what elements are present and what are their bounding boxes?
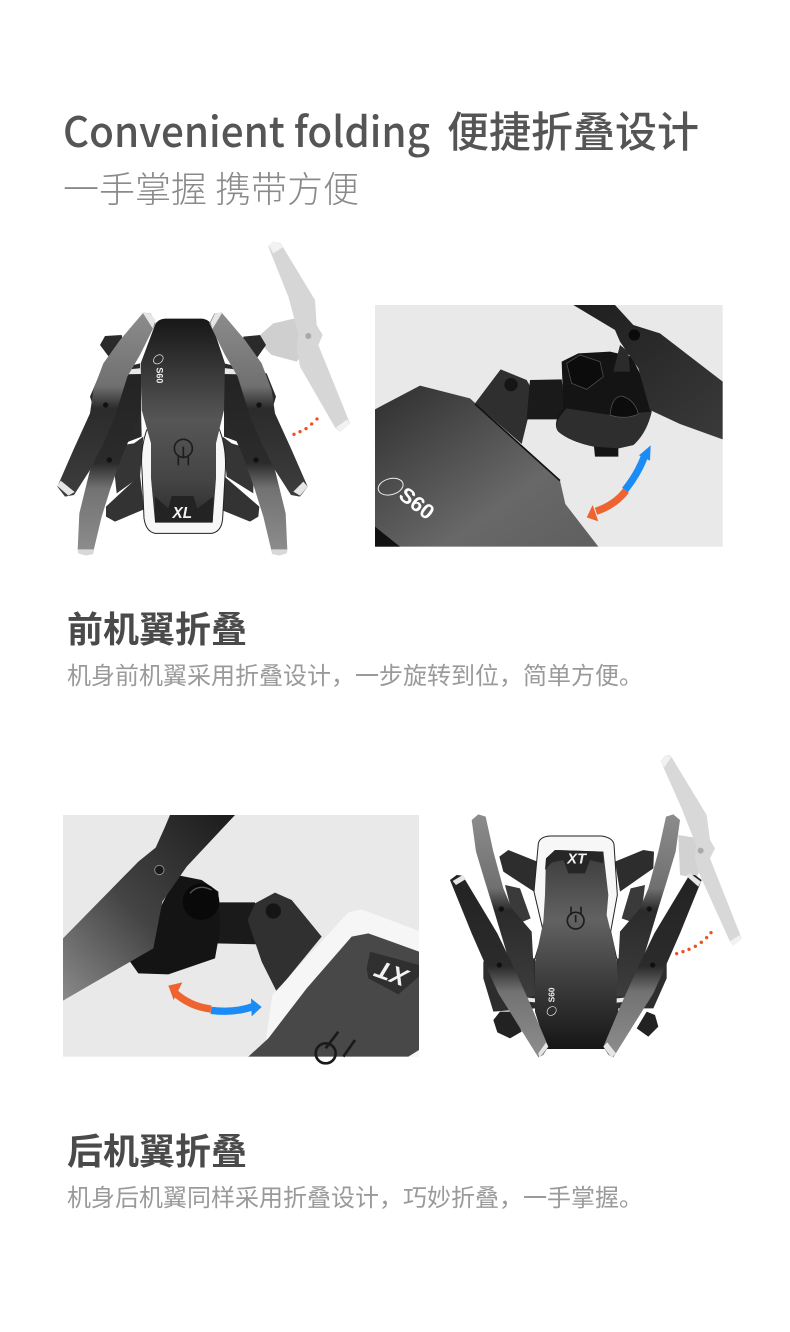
front blades xyxy=(57,313,308,497)
logo plate xyxy=(367,952,419,994)
section text: rear wing: 机身后机翼同样采用折叠设计，巧妙折叠，一手掌握。 xyxy=(67,1178,643,1213)
body logo: S60 xyxy=(546,987,556,1002)
arm bracket xyxy=(475,369,534,444)
photo panel: front arm close-up xyxy=(375,305,723,547)
power icon xyxy=(316,1032,355,1063)
drone body xyxy=(248,933,419,1057)
rivet xyxy=(504,378,518,391)
prop rivet xyxy=(155,865,164,875)
rear arms and motors xyxy=(90,335,276,522)
ghost propeller xyxy=(661,756,742,946)
section heading: front wing: 前机翼折叠 xyxy=(67,601,247,653)
ghost propeller xyxy=(260,242,350,432)
panel background xyxy=(63,815,419,1057)
propeller xyxy=(573,305,723,439)
cap highlight xyxy=(190,887,212,893)
photo panel: rear arm close-up xyxy=(63,815,419,1063)
body logo: S60 xyxy=(155,367,165,383)
drone body xyxy=(375,386,598,547)
white shell xyxy=(142,427,226,533)
arrow: blue xyxy=(211,998,262,1016)
propeller xyxy=(63,815,235,1001)
rear blade xyxy=(78,372,142,554)
rear blade right xyxy=(223,372,287,554)
arrow: blue xyxy=(625,445,651,490)
arrow: orange xyxy=(587,491,626,521)
subtitle: 一手掌握 携带方便 xyxy=(63,161,359,213)
arm bar xyxy=(527,379,567,419)
corner accent xyxy=(375,527,400,547)
motor lower xyxy=(556,408,652,448)
power icon xyxy=(567,907,584,929)
section text: front wing: 机身前机翼采用折叠设计，一步旋转到位，简单方便。 xyxy=(67,656,643,691)
outer blades xyxy=(450,873,702,1058)
title xyxy=(63,99,699,160)
motor cap xyxy=(567,355,638,417)
body edge xyxy=(475,404,560,481)
drone: rear arm folding xyxy=(450,756,742,1058)
prop hole xyxy=(629,329,640,341)
motor cap xyxy=(183,883,219,920)
title: 便捷折叠设计 xyxy=(447,99,699,160)
logo mark xyxy=(545,1005,558,1017)
S60 logo: S60 xyxy=(394,482,439,525)
rear arms and motors xyxy=(483,850,667,1038)
drone: front arm folding xyxy=(57,242,350,556)
arm bracket xyxy=(248,893,322,992)
dotted arc xyxy=(292,417,319,436)
top notch xyxy=(545,850,603,873)
panel background xyxy=(375,305,723,547)
motor housing xyxy=(556,352,652,457)
XT logo: XT xyxy=(566,851,587,867)
rivet xyxy=(266,903,281,919)
logo mark xyxy=(376,476,405,498)
title: Convenient folding xyxy=(63,99,430,160)
motor housing xyxy=(130,875,220,974)
drone body xyxy=(535,850,618,1049)
white shell xyxy=(534,836,617,958)
drone body xyxy=(141,319,225,522)
arm bar xyxy=(215,902,258,944)
inner blades xyxy=(472,814,680,1003)
dotted arc xyxy=(675,931,713,955)
XT logo: XT xyxy=(371,954,414,991)
arrow: orange xyxy=(168,982,211,1009)
drone body shell xyxy=(248,909,419,1057)
blade tips xyxy=(78,368,288,556)
logo mark xyxy=(152,353,165,366)
body lower panel xyxy=(155,496,213,523)
XL logo: XL xyxy=(172,505,192,522)
section heading: rear wing: 后机翼折叠 xyxy=(67,1123,247,1175)
power icon xyxy=(174,439,192,465)
prop shaft xyxy=(613,345,630,372)
